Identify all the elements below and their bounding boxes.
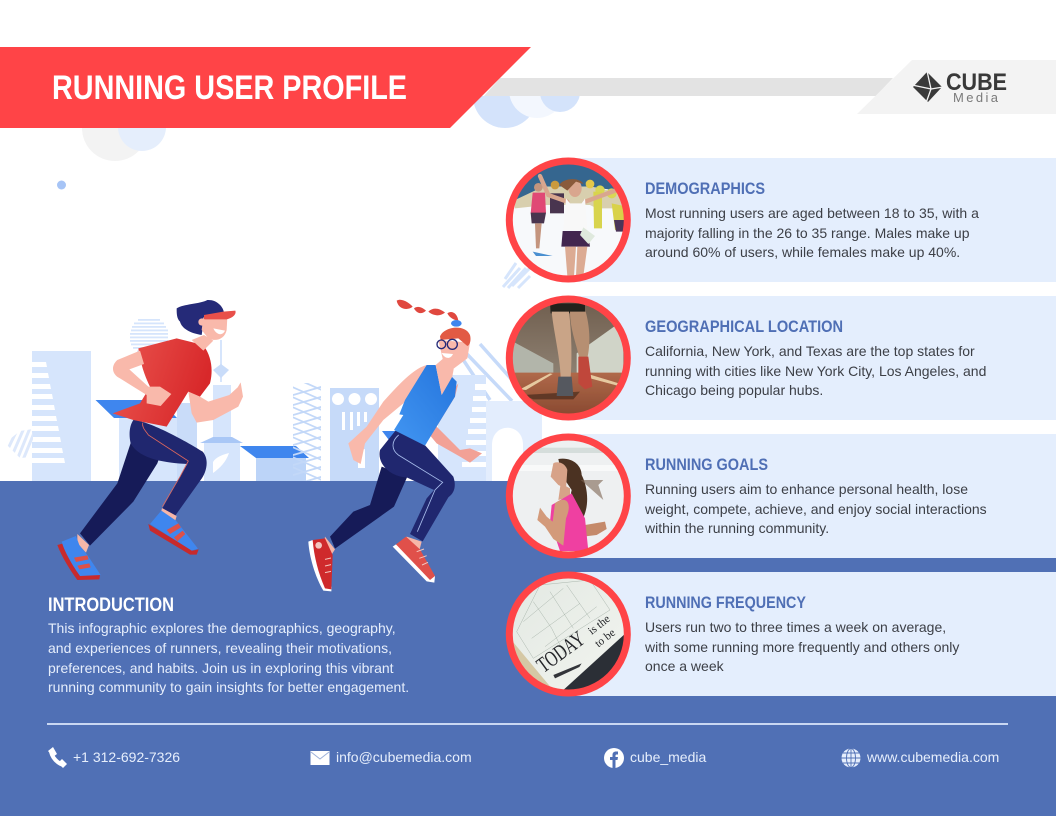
decorative circles — [57, 96, 580, 190]
building with blue roof — [96, 400, 197, 481]
photo ring — [509, 299, 627, 417]
photo: woman running — [512, 440, 624, 552]
introduction text: preferences, and habits. Join us in exploring this vibrant — [48, 660, 394, 676]
header gray bar — [484, 78, 893, 96]
illustration: female runner — [308, 300, 482, 591]
panel: demographics — [506, 158, 1056, 283]
contact: facebook — [604, 748, 706, 768]
cap brim — [204, 311, 236, 319]
card background — [568, 158, 1056, 282]
front shoe — [393, 537, 435, 583]
far arm — [428, 383, 482, 463]
back leg — [330, 467, 407, 549]
smile — [442, 353, 453, 358]
front leg — [379, 430, 455, 541]
photo: calendar notebook: to be — [593, 627, 618, 650]
footer contacts — [48, 747, 999, 768]
photo ring — [509, 437, 627, 555]
contact: email: info@cubemedia.com — [336, 749, 472, 765]
heading: GEOGRAPHICAL LOCATION — [645, 317, 843, 336]
body text: with some running more frequently and others only — [644, 639, 959, 655]
body text: once a week — [645, 658, 725, 674]
near arm — [348, 365, 427, 464]
building with round windows — [330, 388, 379, 481]
card background — [568, 434, 1056, 558]
contact: phone — [48, 747, 180, 768]
small blue roof — [382, 431, 431, 444]
hair — [177, 300, 224, 335]
tank top — [394, 365, 457, 446]
title banner — [0, 47, 531, 128]
back ankle — [77, 534, 89, 553]
ponytail — [397, 300, 458, 321]
photo ring — [509, 575, 627, 693]
body text — [644, 619, 959, 674]
face — [438, 340, 470, 368]
title: RUNNING USER PROFILE — [52, 69, 407, 107]
photo: calendar notebook — [512, 578, 624, 690]
body text: California, New York, and Texas are the top states for — [645, 343, 975, 359]
contact: facebook: cube_media — [630, 749, 706, 765]
house with blue roof — [240, 446, 309, 481]
body text — [645, 343, 986, 398]
body text: Most running users are aged between 18 to 35, with a — [645, 205, 979, 221]
neck — [192, 335, 213, 351]
heading: RUNNING FREQUENCY — [645, 593, 807, 612]
face — [202, 317, 227, 340]
striped circle — [130, 319, 168, 352]
back shoe — [57, 536, 101, 580]
body text — [645, 205, 979, 260]
ear — [198, 318, 206, 326]
arch building — [486, 401, 542, 481]
front shoe — [148, 511, 199, 555]
far arm — [188, 382, 243, 423]
illustration: male runner — [57, 300, 243, 580]
back leg — [80, 423, 167, 546]
panel: running frequency — [506, 572, 1056, 702]
introduction heading: INTRODUCTION — [48, 595, 174, 616]
body text: within the running community. — [644, 520, 829, 536]
body text: Users run two to three times a week on average, — [645, 619, 946, 635]
body text: running with cities like New York City, Los Angeles, and — [645, 363, 986, 379]
leg seam — [143, 423, 188, 507]
logo wordmark: CUBE — [946, 69, 1007, 96]
front leg — [130, 420, 207, 516]
body text: Chicago being popular hubs. — [645, 382, 823, 398]
leaf decoration left — [8, 429, 33, 458]
photo: calendar notebook: TODAY — [532, 626, 589, 677]
heading: DEMOGRAPHICS — [645, 179, 765, 198]
back shoe — [308, 537, 335, 591]
hair — [440, 328, 471, 346]
smile — [213, 328, 225, 334]
panel: geographical location — [506, 296, 1056, 421]
photo: race runner — [515, 164, 624, 276]
body text: Running users aim to enhance personal health, lose — [645, 481, 968, 497]
logo panel — [857, 60, 1056, 114]
building: striped tower — [32, 351, 91, 481]
lattice tower — [293, 383, 321, 481]
body text: weight, compete, achieve, and enjoy social interactions — [644, 501, 987, 517]
body text: majority falling in the 26 to 35 range. Males make up — [645, 225, 970, 241]
photo: calendar notebook: is the — [586, 613, 613, 637]
logo — [912, 69, 1007, 105]
hair bun — [451, 320, 462, 327]
front ankle — [161, 508, 177, 522]
card background — [568, 572, 1056, 696]
introduction text — [48, 620, 409, 695]
neck — [436, 358, 455, 395]
striped building right — [438, 375, 486, 481]
body text: around 60% of users, while females make up 40%. — [645, 244, 960, 260]
contact: website: www.cubemedia.com — [866, 749, 999, 765]
logo mark — [912, 71, 943, 103]
shirt — [113, 338, 212, 427]
footer divider — [47, 723, 1008, 725]
heading: RUNNING GOALS — [645, 455, 768, 474]
photo: legs on track — [512, 302, 624, 414]
introduction text: running community to gain insights for better engagement. — [48, 679, 409, 695]
bell tower — [200, 340, 243, 481]
panel: running goals — [506, 434, 1056, 559]
body text — [644, 481, 987, 536]
glasses — [437, 339, 457, 349]
near arm — [113, 351, 171, 406]
leg seam — [393, 435, 443, 532]
contact: phone: +1 312-692-7326 — [73, 749, 180, 765]
introduction text: This infographic explores the demographics, geography, — [48, 620, 396, 636]
blue ground background — [0, 481, 1056, 816]
logo subtitle: Media — [953, 90, 999, 105]
introduction text: and experiences of runners, revealing their motivations, — [48, 640, 392, 656]
card background — [568, 296, 1056, 420]
city skyline illustration — [5, 319, 545, 486]
photo ring — [509, 161, 627, 279]
decorative leaf behind cards — [503, 263, 530, 288]
diagonal stripes — [462, 344, 545, 452]
introduction — [48, 595, 409, 695]
